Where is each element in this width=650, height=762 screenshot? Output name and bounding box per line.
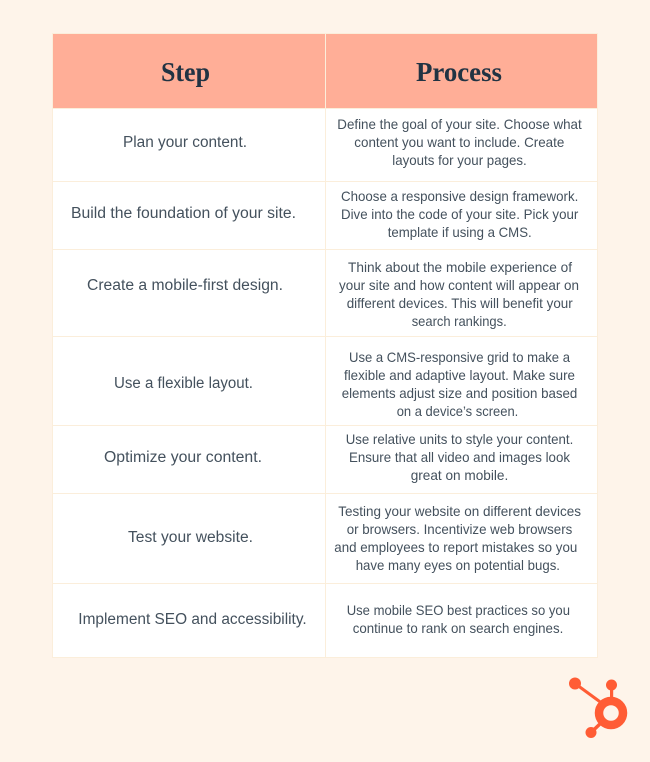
step 1: Plan your content. [123,134,247,151]
row 2 [71,188,579,240]
process 4: Use a CMS-responsive grid to make a [349,349,570,365]
process 3: different devices. This will benefit your [347,295,573,311]
process 2: Choose a responsive design framework. [341,188,578,204]
process 4: on a device’s screen. [397,403,518,419]
step 7: Implement SEO and accessibility. [78,611,307,628]
process 6: have many eyes on potential bugs. [356,557,560,573]
process 5: Use relative units to style your content. [346,431,573,447]
row 3 [87,259,579,329]
process 3 [339,259,579,329]
process 6: or browsers. Incentivize web browsers [347,521,572,537]
icon: HubSpot logo [569,678,623,738]
process 1: layouts for your pages. [392,152,527,168]
row 4 [114,349,577,419]
step 6: Test your website. [128,529,253,546]
process 3: your site and how content will appear on [339,277,579,293]
process 2: Dive into the code of your site. Pick your [341,206,579,222]
row 6 [128,503,581,573]
step 4: Use a flexible layout. [114,375,253,392]
process 1 [337,116,582,168]
process 3: Think about the mobile experience of [348,259,572,275]
step 3: Create a mobile-first design. [87,277,283,294]
process 7: Use mobile SEO best practices so you [347,602,570,618]
process 7 [347,602,570,636]
process 1: Define the goal of your site. Choose what [337,116,582,132]
row 7 [78,602,570,636]
row 1 [123,116,582,168]
step 5: Optimize your content. [104,449,262,466]
process 5: great on mobile. [411,467,508,483]
process 6 [334,503,581,573]
process 6: Testing your website on different devices [338,503,581,519]
process 7: continue to rank on search engines. [353,620,563,636]
process 5: Ensure that all video and images look [349,449,571,465]
process 3: search rankings. [412,313,507,329]
panel: table background [52,33,598,658]
process 4: elements adjust size and position based [342,385,577,401]
process 2: template if using a CMS. [388,224,532,240]
process 6: and employees to report mistakes so you [334,539,577,555]
process 5 [346,431,573,483]
process 4: flexible and adaptive layout. Make sure [344,367,575,383]
panel: table header [52,33,598,108]
heading: Step: Step [161,57,210,87]
process 2 [341,188,579,240]
process 4 [342,349,577,419]
process 1: content you want to include. Create [354,134,565,150]
step 2: Build the foundation of your site. [71,205,296,222]
heading: Process: Process [416,57,502,87]
row 5 [104,431,573,483]
